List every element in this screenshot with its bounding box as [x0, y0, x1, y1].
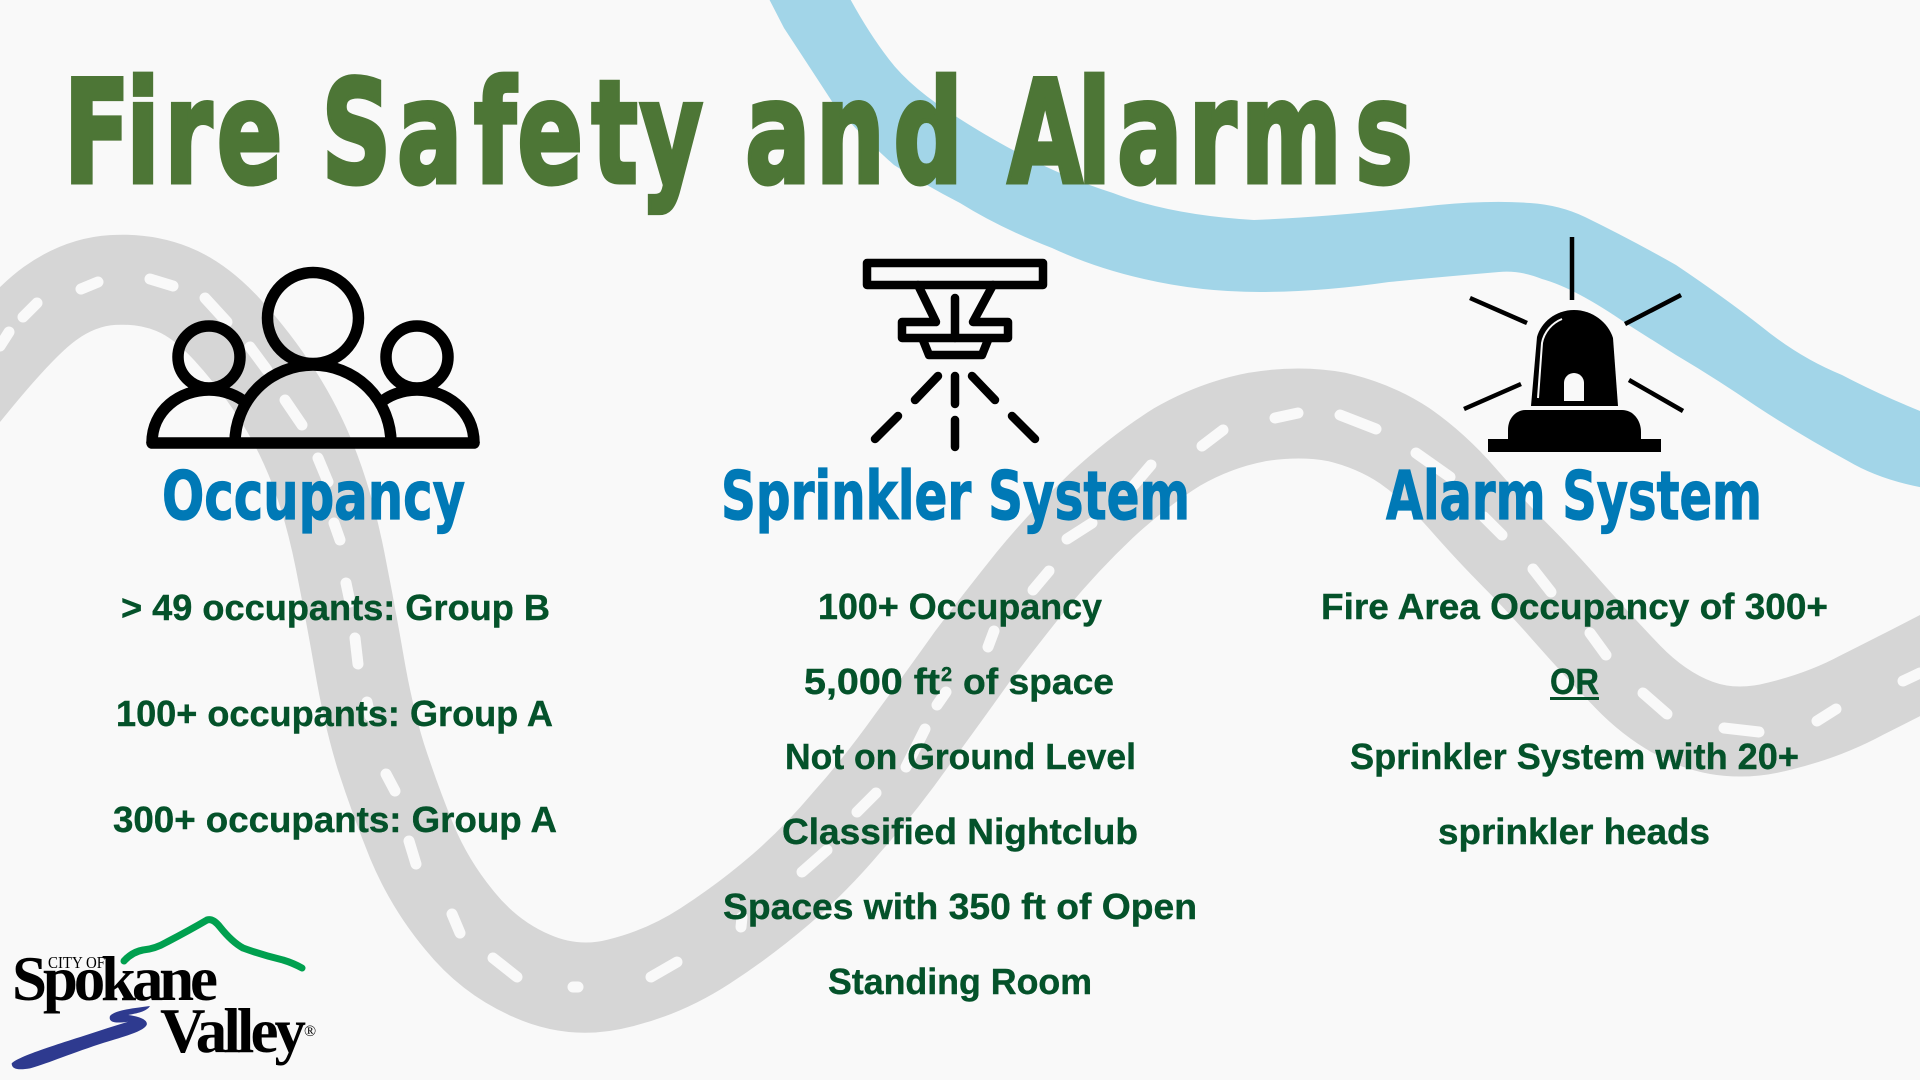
text block: sprinkler requirements: Not on Ground Level: [785, 736, 1136, 777]
text block: sprinkler requirements: Classified Nightclub: [782, 811, 1138, 852]
text block: occupancy groups: 300+ occupants: Group A: [113, 799, 557, 840]
text block: occupancy groups: > 49 occupants: Group B: [121, 587, 550, 628]
text block: sprinkler requirements: of space: [963, 661, 1114, 702]
river background: [767, 0, 1920, 488]
icon: sprinkler: [867, 263, 1043, 447]
logo: City of Spokane Valley: [12, 920, 316, 1069]
text block: sprinkler requirements: Standing Room: [828, 961, 1092, 1002]
text block: sprinkler requirements: 2: [941, 664, 952, 686]
heading: alarm system: Alarm System: [1386, 457, 1762, 535]
icon: people: [152, 272, 474, 443]
logo: City of Spokane Valley: ®: [304, 1023, 316, 1040]
title: Fire Safety and Alarms: [64, 50, 1413, 216]
road background with centre dashes: [0, 279, 1920, 988]
text block: sprinkler requirements: [723, 586, 1197, 1002]
icon: alarm beacon: [1464, 237, 1683, 452]
logo: City of Spokane Valley: Spokane: [12, 944, 218, 1014]
text block: occupancy groups: 100+ occupants: Group A: [116, 693, 553, 734]
text block: alarm requirements: Fire Area Occupancy of 300+: [1321, 586, 1828, 627]
text block: alarm requirements: OR: [1550, 661, 1599, 702]
text block: alarm requirements: Sprinkler System with 20+: [1350, 736, 1799, 777]
text block: sprinkler requirements: 100+ Occupancy: [818, 586, 1102, 627]
heading: sprinkler system: Sprinkler System: [721, 457, 1190, 535]
text block: sprinkler requirements: Spaces with 350 ft of Open: [723, 886, 1197, 927]
text block: sprinkler requirements: 5,000 ft: [804, 661, 940, 702]
logo: City of Spokane Valley: Valley: [160, 996, 306, 1066]
heading: occupancy: Occupancy: [162, 457, 465, 535]
text block: alarm requirements: [1321, 586, 1828, 852]
logo: City of Spokane Valley: CITY OF: [48, 953, 105, 972]
text block: occupancy groups: [113, 587, 557, 840]
text block: alarm requirements: sprinkler heads: [1438, 811, 1710, 852]
